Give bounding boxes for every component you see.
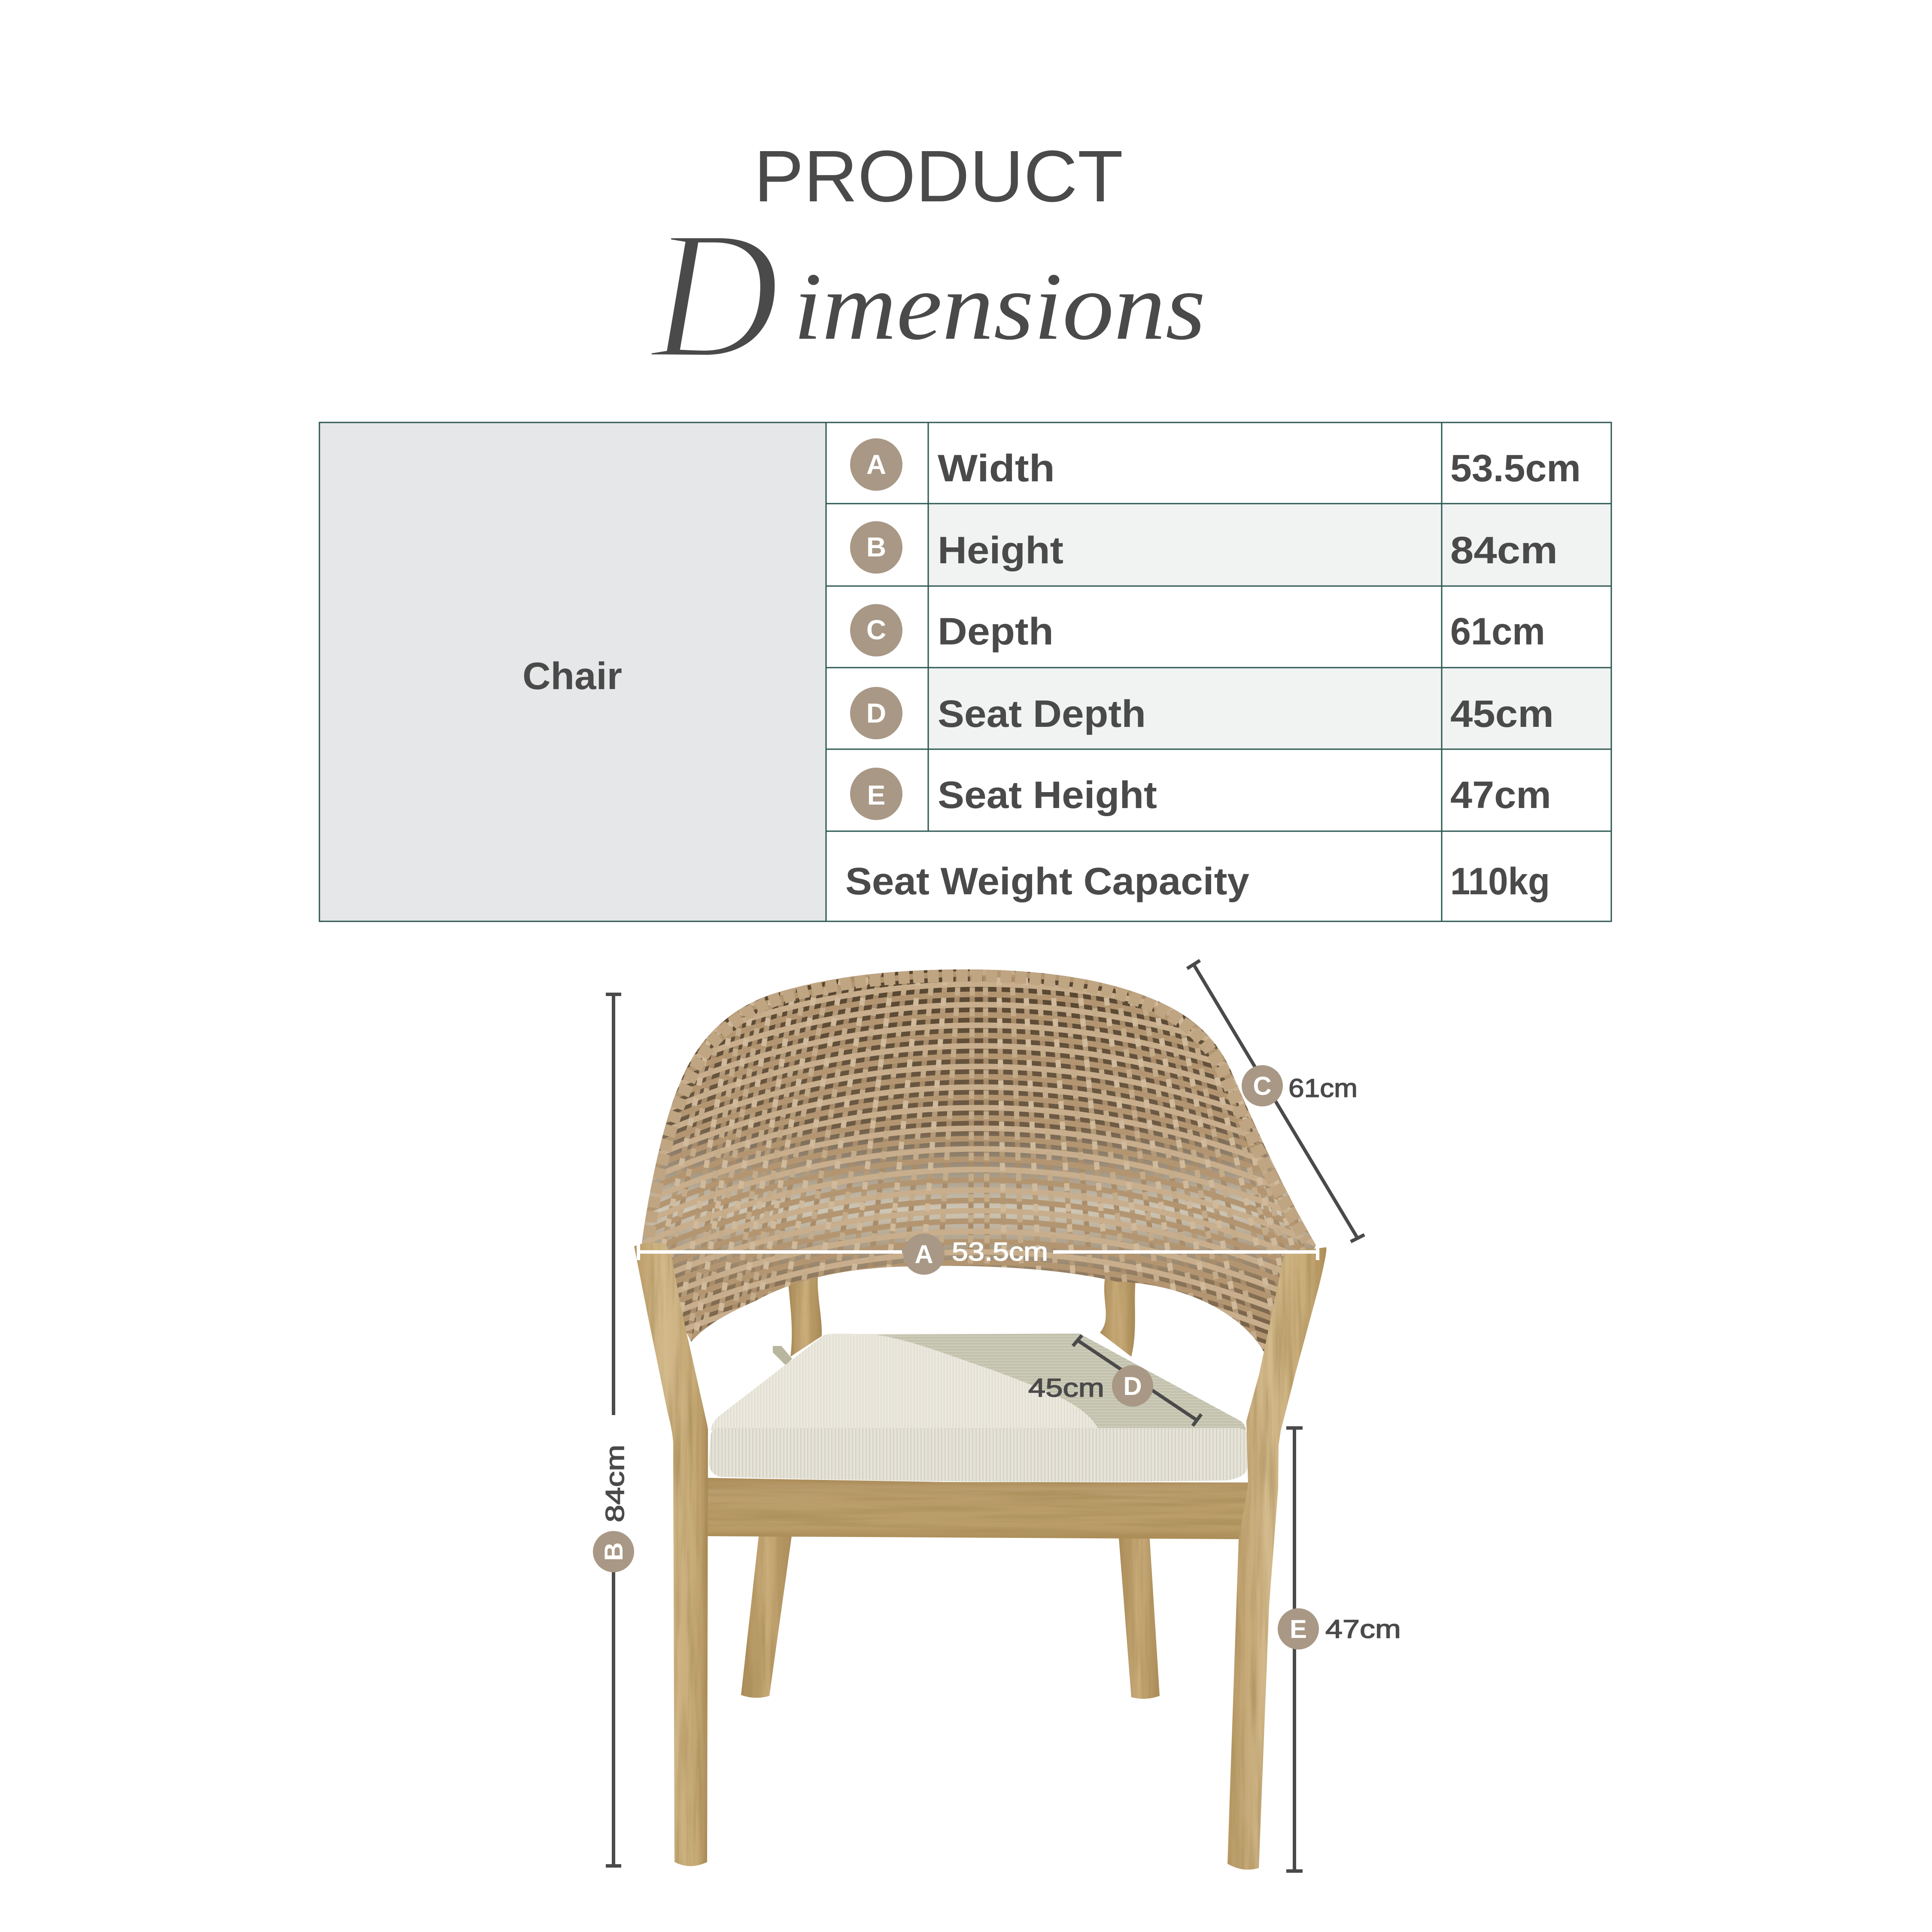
chair: cushion <box>709 1334 1247 1482</box>
row shading: height <box>928 504 1611 586</box>
value: 84cm: 84cm <box>1450 529 1558 571</box>
value: 61cm: 61cm <box>1450 610 1545 653</box>
row label: Seat Height: Seat Height <box>938 773 1157 816</box>
dimension E: seat height <box>1278 1428 1401 1871</box>
row label: Depth: Depth <box>938 610 1054 653</box>
dimensions table <box>319 422 1611 921</box>
label 61cm: 61cm <box>1288 1074 1358 1103</box>
badge E <box>850 768 902 820</box>
cushion shadow <box>876 1334 1246 1431</box>
badge C: C <box>866 614 886 645</box>
dimension C: depth <box>1187 960 1364 1242</box>
chair: seat rail <box>703 1478 1249 1539</box>
label 53.5cm: 53.5cm <box>952 1237 1048 1266</box>
dimension A: width <box>638 1233 1318 1275</box>
label 47cm: 47cm <box>1325 1615 1401 1643</box>
chair illustration <box>634 902 1334 1870</box>
dimension B: height <box>593 994 634 1866</box>
value: 45cm: 45cm <box>1450 692 1554 735</box>
badge E: E <box>867 780 885 811</box>
badge B <box>593 1531 634 1572</box>
badge A <box>850 438 902 491</box>
label 45cm: 45cm <box>1028 1373 1104 1402</box>
badge C: C <box>1253 1072 1272 1100</box>
badge D: D <box>1123 1372 1142 1400</box>
dimension D: seat depth <box>1028 1335 1201 1426</box>
badge D <box>1112 1365 1153 1406</box>
value: 110kg: 110kg <box>1450 860 1550 902</box>
badge B: B <box>866 532 886 562</box>
value: 47cm: 47cm <box>1450 773 1551 816</box>
chair: front right leg and arm <box>1227 1247 1326 1870</box>
title line: Dimensions script: D <box>649 193 779 396</box>
cushion top <box>711 1334 1246 1431</box>
row label: Height: Height <box>938 529 1063 571</box>
panel: chair name cell <box>319 422 826 921</box>
cushion side loop <box>773 1346 792 1365</box>
label: Chair: Chair <box>522 654 622 697</box>
title line: PRODUCT: PRODUCT <box>754 136 1123 217</box>
badge C <box>1242 1065 1283 1106</box>
badge A: A <box>914 1240 933 1269</box>
chair: front left leg and arm <box>634 1242 708 1866</box>
chair: back legs and posts <box>741 1275 1160 1699</box>
title line: Dimensions script: imensions <box>793 252 1206 360</box>
row label: Seat Depth: Seat Depth <box>938 692 1146 735</box>
badge E <box>1278 1608 1319 1649</box>
badge A <box>903 1233 945 1275</box>
row label: Width: Width <box>938 447 1055 489</box>
value: 53.5cm: 53.5cm <box>1450 447 1581 489</box>
badge B: B <box>599 1542 628 1561</box>
badge D: D <box>866 698 886 729</box>
badge E: E <box>1290 1615 1307 1643</box>
row label: Seat Weight Capacity: Seat Weight Capacity <box>845 860 1250 902</box>
row shading: seat depth <box>928 668 1611 749</box>
badge B <box>850 521 902 574</box>
badge D <box>850 687 902 739</box>
chair: woven backrest <box>642 969 1316 1352</box>
label 84cm: 84cm <box>601 1445 629 1522</box>
badge C <box>850 604 902 656</box>
badge A: A <box>866 449 886 480</box>
title <box>649 136 1206 396</box>
table grid <box>319 422 1611 921</box>
cushion front <box>709 1428 1247 1482</box>
